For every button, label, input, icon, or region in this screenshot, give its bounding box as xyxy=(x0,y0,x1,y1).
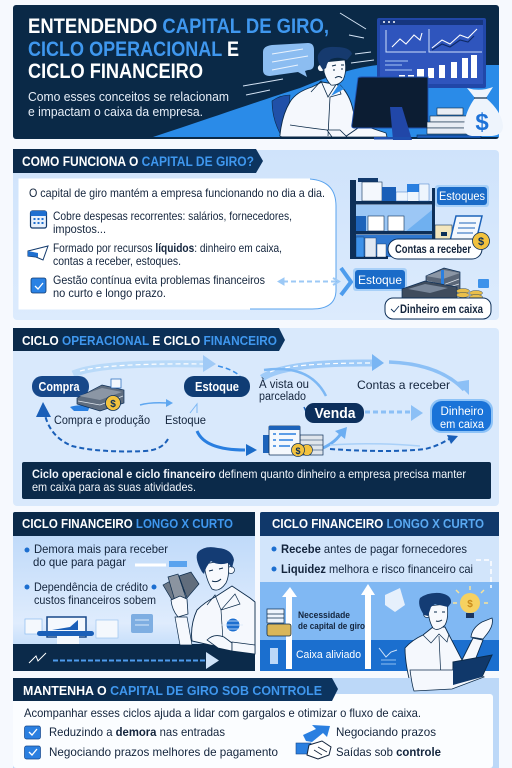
dark timeline strip xyxy=(13,644,255,671)
text: recursos xyxy=(53,241,282,268)
man with tablet xyxy=(405,593,492,690)
callout: dark summary box: em caixa para as suas atividades. xyxy=(32,480,196,494)
pill: estoque: Estoque xyxy=(195,380,239,394)
man holding cash xyxy=(163,547,255,654)
text: recursos: contas a receber, estoques. xyxy=(53,254,181,268)
pill: dinheiro em caixa xyxy=(385,298,491,319)
heading: CICLO FINANCEIRO xyxy=(28,60,203,83)
white text card xyxy=(19,179,336,309)
panel heading: CICLO FINANCEIRO LONGO X CURTO xyxy=(22,516,233,531)
blue bands xyxy=(260,560,499,671)
faint icons xyxy=(270,588,405,664)
icon: check xyxy=(31,278,46,293)
panel heading: CICLO FINANCEIRO LONGO X CURTO xyxy=(272,516,484,531)
white text card: O capital de giro mantém a empresa funcionando no dia a dia. xyxy=(29,186,325,200)
section heading: MANTENHA O CAPITAL DE GIRO SOB CONTROLE xyxy=(23,683,322,698)
cash pile xyxy=(402,268,489,300)
server stack icon xyxy=(267,609,291,636)
icon: coin xyxy=(472,232,490,250)
label: caixa aliviado: Caixa aliviado xyxy=(296,649,361,661)
upward arrows xyxy=(282,584,375,669)
dashed arrow xyxy=(278,278,339,285)
panel heading xyxy=(260,512,499,536)
label: compra e producao: Compra e produção xyxy=(54,415,150,427)
check item: demora: Reduzindo a demora nas entradas xyxy=(49,725,225,739)
section heading xyxy=(13,149,263,173)
pill: contas a receber: Contas a receber xyxy=(395,244,471,256)
icon: paper plane xyxy=(28,246,48,260)
desk illustration xyxy=(25,561,187,644)
text: gestao: no curto e longo prazo. xyxy=(53,286,166,300)
label: necessidade de capital de giro: Necessidade xyxy=(298,610,350,620)
pill: dinheiro em caixa: Dinheiro xyxy=(440,406,484,418)
pill: compra xyxy=(32,376,89,397)
label: necessidade de capital de giro xyxy=(298,610,365,631)
bullet list xyxy=(272,542,473,576)
cash with coin xyxy=(70,379,124,411)
chart monitor xyxy=(377,18,486,88)
text: saidas sob controle: Saídas sob controle xyxy=(336,745,441,759)
text: despesas: Cobre despesas recorrentes: salários, fornecedores, xyxy=(53,209,292,223)
button: estoques: Estoques xyxy=(439,189,485,203)
text: despesas xyxy=(53,209,292,236)
text: gestao: Gestão contínua evita problemas financeiros xyxy=(53,273,265,287)
man's arm overlap xyxy=(410,670,484,691)
icon: handshake xyxy=(296,725,331,759)
panel: como funciona o capital de giro xyxy=(13,149,499,320)
flow arrows xyxy=(36,354,469,456)
tablet overlap xyxy=(453,664,486,685)
panel: mantenha o capital de giro sob controle xyxy=(13,664,499,768)
pill: venda xyxy=(305,403,364,423)
bullet list: Dependência de crédito xyxy=(34,580,148,594)
text: despesas: impostos... xyxy=(53,222,106,236)
pill: compra: Compra xyxy=(38,380,80,394)
pill: venda: Venda xyxy=(314,405,356,422)
section heading xyxy=(13,678,338,701)
text: negociando prazos: Negociando prazos xyxy=(336,725,436,739)
section heading: CICLO OPERACIONAL E CICLO FINANCEIRO xyxy=(22,333,277,348)
chevron xyxy=(341,268,351,295)
worker at desk xyxy=(272,47,387,137)
bullet list xyxy=(24,542,168,607)
intro text: Acompanhar esses ciclos ajuda a lidar com gargalos e otimizar o fluxo de caixa. xyxy=(24,706,421,720)
document with coins: $ xyxy=(295,446,301,456)
button: estoque xyxy=(353,268,407,291)
panel: ciclo financeiro longo xyxy=(13,512,255,671)
white card xyxy=(13,694,493,768)
pill: dinheiro em caixa xyxy=(430,399,493,433)
bullet list: Demora mais para receber xyxy=(34,542,168,556)
heading: CICLO OPERACIONAL E xyxy=(28,38,239,61)
button: estoque: Estoque xyxy=(358,273,402,287)
icon: calendar xyxy=(30,211,46,228)
heading: ENTENDENDO CAPITAL DE GIRO, xyxy=(28,15,329,38)
icon: light bulb xyxy=(453,586,488,618)
label: a vista ou parcelado: À vista ou xyxy=(259,378,309,391)
pill: contas a receber xyxy=(388,239,482,259)
callout: dark summary box: Ciclo operacional e ciclo financeiro definem quanto dinheiro a empresa precisa manter xyxy=(32,467,466,481)
cash with coin: $ xyxy=(110,399,116,410)
panel heading xyxy=(13,512,255,536)
subtitle: e impactam o caixa da empresa. xyxy=(28,105,203,119)
panel: ciclo financeiro curto xyxy=(260,512,499,690)
callout: dark summary box xyxy=(22,462,491,499)
button: estoques xyxy=(435,185,489,207)
panel: ciclo operacional e ciclo financeiro xyxy=(13,328,499,506)
label: necessidade de capital de giro: de capital de giro xyxy=(298,621,365,631)
money bag: $ xyxy=(475,109,489,136)
speech bubble xyxy=(263,43,314,77)
section heading: COMO FUNCIONA O CAPITAL DE GIRO? xyxy=(22,154,254,169)
shelf with boxes xyxy=(350,178,435,259)
check item: prazos: Negociando prazos melhores de pagamento xyxy=(49,745,278,759)
icon: coin: $ xyxy=(478,236,484,248)
bullet list: custos financeiros sobem xyxy=(34,593,156,607)
subtitle: Como esses conceitos se relacionam xyxy=(28,90,229,104)
section heading xyxy=(13,328,285,351)
bullet list: Liquidez melhora e risco financeiro cai xyxy=(281,562,473,576)
clipboard and box xyxy=(435,216,482,241)
heading xyxy=(28,15,329,83)
speed lines xyxy=(243,13,374,95)
bullet list: do que para pagar xyxy=(33,555,126,569)
document with coins xyxy=(263,426,323,456)
cash stacks xyxy=(417,108,481,138)
pill: estoque xyxy=(184,376,250,397)
icon: light bulb: $ xyxy=(467,599,473,610)
money bag xyxy=(464,87,503,136)
label: contas a receber: Contas a receber xyxy=(357,378,450,392)
subtitle xyxy=(28,90,229,119)
label: a vista ou parcelado: parcelado xyxy=(259,391,306,403)
desk monitor xyxy=(352,77,428,140)
header banner xyxy=(13,5,503,140)
pill: dinheiro em caixa: em caixa xyxy=(440,419,485,431)
bullet list: Recebe antes de pagar fornecedores xyxy=(281,542,467,556)
label: estoque: Estoque xyxy=(165,415,206,427)
label: a vista ou parcelado xyxy=(259,378,309,403)
text: recursos: Formado por recursos líquidos: dinheiro em caixa, xyxy=(53,241,282,255)
pill: dinheiro em caixa: Dinheiro em caixa xyxy=(400,304,484,316)
text: gestao xyxy=(53,273,265,300)
